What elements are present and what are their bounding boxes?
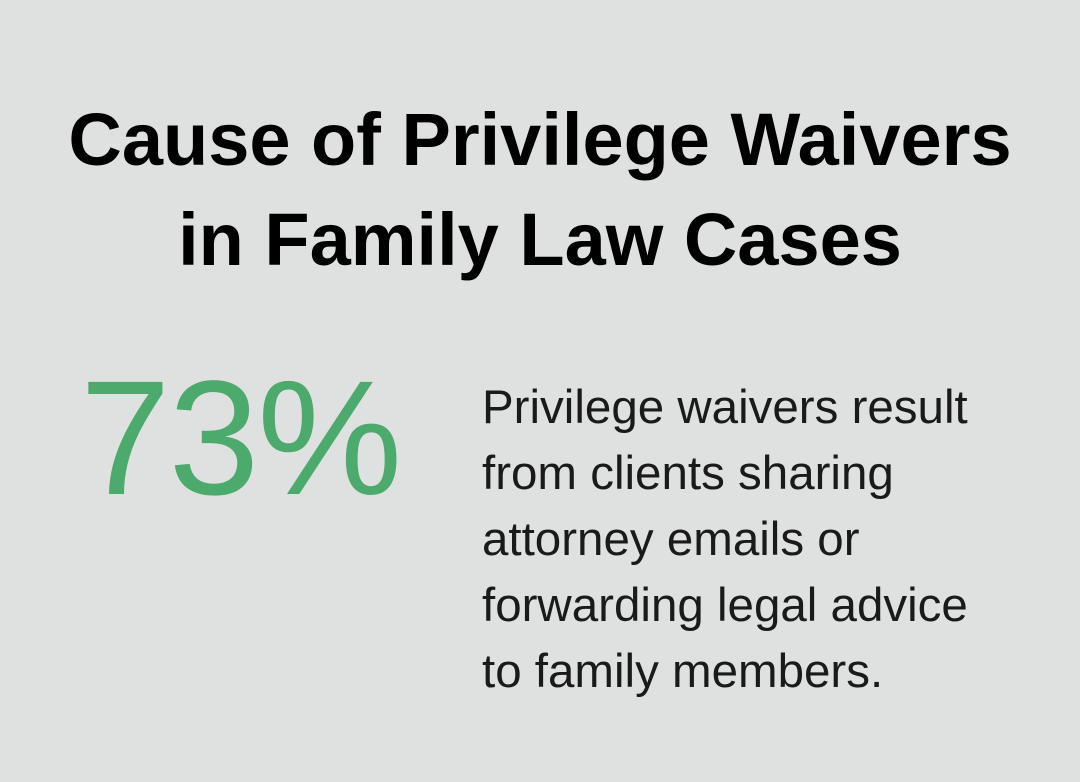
description text: from clients sharing <box>482 447 894 500</box>
title <box>68 98 1012 281</box>
description text: to family members. <box>482 645 883 698</box>
title: Cause of Privilege Waivers <box>68 98 1012 181</box>
description text: attorney emails or <box>482 513 860 566</box>
description text: Privilege waivers result <box>482 381 968 434</box>
description text: forwarding legal advice <box>482 579 968 632</box>
title: in Family Law Cases <box>178 198 902 281</box>
description text <box>482 381 968 698</box>
stat number: 73% <box>80 346 400 529</box>
